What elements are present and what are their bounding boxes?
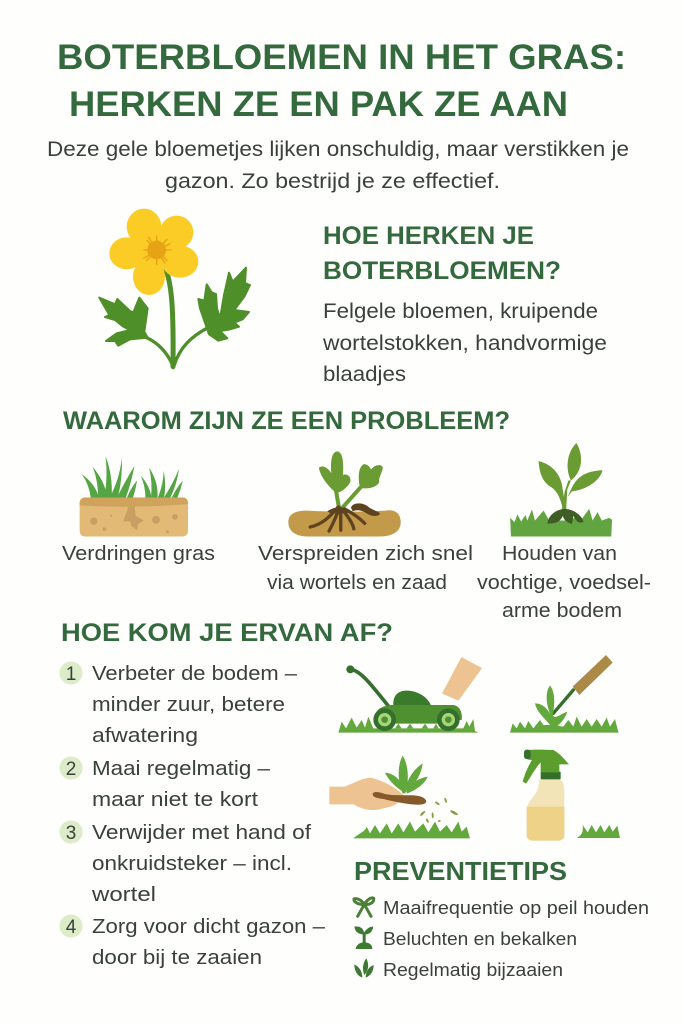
step 2: Maai regelmatig – [92,757,271,780]
icon: spray bottle [523,750,620,841]
label: spreading: via wortels en zaad [267,572,447,594]
step 2 [60,756,271,811]
icon: leaves [354,958,374,978]
tip texts: Maaifrequentie op peil houden [383,897,649,918]
label: soil preference: vochtige, voedsel- [477,572,651,594]
step 1 [60,662,298,747]
label: displace grass: Verdringen gras [62,543,215,565]
heading: removal: HOE KOM JE ERVAN AF? [61,619,393,647]
step 4: door bij te zaaien [92,946,262,969]
step 4: 4 [66,917,77,938]
problem labels [62,543,651,622]
intro text [47,138,629,193]
intro text: gazon. Zo bestrijd je ze effectief. [165,170,500,193]
title: BOTERBLOEMEN IN HET GRAS: [57,38,626,77]
icon: soil sample [443,658,481,700]
icon: lawn mower [338,658,481,733]
title [57,38,626,124]
prevention tips list [354,897,649,980]
icon: seedling [354,926,373,949]
step 4: Zorg voor dicht gazon – [92,915,326,938]
icon: grass on soil [80,456,188,536]
label: spreading: Verspreiden zich snel [258,543,473,565]
label: soil preference [477,543,651,622]
heading: problem: WAAROM ZIJN ZE EEN PROBLEEM? [63,407,510,435]
icon: buttercup flower [99,209,250,370]
label: soil preference: arme bodem [502,600,622,622]
icon: weeding tool [510,655,619,733]
intro text: Deze gele bloemetjes lijken onschuldig, maar verstikken je [47,138,629,161]
identification text: blaadjes [323,363,406,386]
identification text: wortelstokken, handvormige [322,332,607,355]
step 1: afwatering [92,724,198,747]
step 1: 1 [66,664,76,685]
icon: hand pulling weed with root [329,756,470,838]
tip texts: Beluchten en bekalken [383,928,577,949]
step 1: Verbeter de bodem – [92,662,298,685]
label: soil preference: Houden van [502,543,617,565]
numbered steps [60,662,326,969]
step 3: Verwijder met hand of [92,821,311,844]
icon: plant in moist soil [510,443,612,536]
tip texts [383,897,649,980]
step 3: 3 [66,823,76,844]
icon: spreading roots [288,451,401,536]
tip texts: Regelmatig bijzaaien [383,959,563,980]
step 2: maar niet te kort [92,788,258,811]
step 1: minder zuur, betere [92,693,285,716]
step 3: onkruidsteker – incl. [92,852,292,875]
step 2: 2 [66,759,76,780]
identification text [322,300,607,386]
heading: prevention tips: PREVENTIETIPS [354,856,567,886]
title: HERKEN ZE EN PAK ZE AAN [69,85,568,124]
heading: identification [323,222,561,285]
icon: scissors sprout [354,898,374,916]
heading: identification: BOTERBLOEMEN? [323,257,561,285]
step 3 [60,820,311,906]
identification text: Felgele bloemen, kruipende [323,300,598,323]
label: spreading [258,543,473,594]
step 3: wortel [91,883,156,906]
step 4 [60,914,326,969]
heading: identification: HOE HERKEN JE [323,222,534,250]
